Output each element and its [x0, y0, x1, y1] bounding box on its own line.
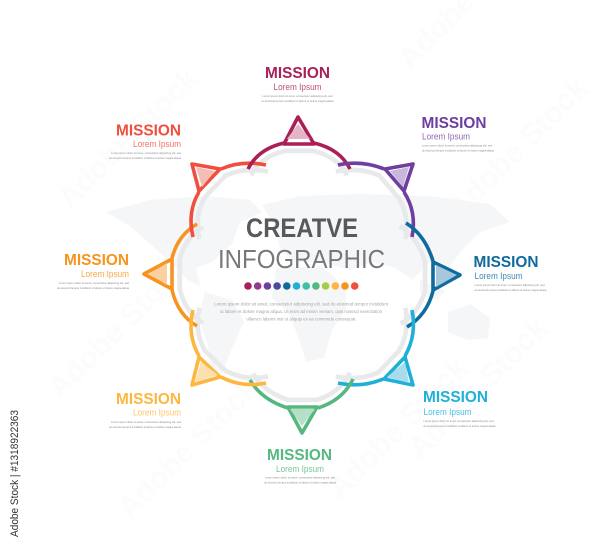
paragraph: ut labore et dolore magna aliqua. Ut enim ad minim veniam, quis nostrud exercitation: [220, 309, 382, 314]
label: left mission: Lorem Ipsum: [81, 269, 129, 280]
label: left mission: MISSION: [64, 252, 129, 269]
label: lower right mission: do eiusmod tempor incididunt ut labore et dolore magna aliqua: [424, 424, 496, 428]
label: upper right mission: Lorem ipsum dolor sit amet, consectetur adipiscing elit, sed: [422, 144, 492, 148]
label: lower left mission: [109, 391, 181, 429]
label: lower right mission: [423, 389, 496, 428]
title: [218, 213, 385, 274]
paragraph: [214, 302, 389, 322]
segment: cyan: [338, 310, 413, 385]
label: bottom mission: MISSION: [267, 447, 332, 464]
label: right mission: [474, 254, 547, 292]
watermark: Adobe Stock: [322, 352, 475, 505]
label: lower left mission: do eiusmod tempor incididunt ut labore et dolore magna aliqua: [109, 425, 181, 429]
label: left mission: Lorem ipsum dolor sit amet, consectetur adipiscing elit, sed: [59, 281, 129, 285]
label: lower right mission: MISSION: [423, 389, 488, 406]
segment: red: [191, 163, 266, 237]
label: bottom mission: Lorem ipsum dolor sit amet, consectetur adipiscing elit, sed: [265, 476, 335, 480]
world map: [106, 194, 510, 380]
label: top mission: Lorem Ipsum: [274, 82, 322, 93]
segment: green: [250, 379, 353, 433]
label: left mission: [57, 252, 129, 290]
label: lower left mission: MISSION: [116, 391, 181, 408]
label: right mission: MISSION: [474, 254, 538, 271]
label: top mission: [262, 65, 334, 103]
label: upper left mission: do eiusmod tempor incididunt ut labore et dolore magna aliqua: [109, 156, 181, 160]
stock id: Adobe Stock | #1318922363: [9, 410, 21, 537]
label: lower left mission: Lorem ipsum dolor sit amet, consectetur adipiscing elit, sed: [111, 420, 181, 424]
watermark: Adobe Stock: [442, 72, 595, 225]
label: bottom mission: do eiusmod tempor incididunt ut labore et dolore magna aliqua: [264, 480, 336, 484]
paragraph: ullamco laboris nisi ut aliquip ex ea commodo consequat: [246, 316, 356, 322]
label: lower right mission: Lorem ipsum dolor sit amet, consectetur adipiscing elit, sed: [424, 419, 494, 423]
label: upper left mission: MISSION: [116, 122, 181, 140]
title: CREATVE: [246, 213, 358, 243]
watermark: Adobe Stock: [402, 312, 555, 465]
label: upper right mission: do eiusmod tempor incididunt ut labore et dolore magna aliqua: [422, 148, 494, 152]
segment: blue: [406, 223, 460, 327]
segment: yellow: [191, 310, 266, 385]
label: top mission: MISSION: [265, 65, 330, 82]
segment: orange: [144, 224, 197, 326]
label: bottom mission: Lorem Ipsum: [276, 464, 324, 475]
segment: crimson: [248, 117, 350, 169]
segment: purple: [338, 163, 413, 237]
watermark: Adobe Stock: [42, 252, 195, 405]
label: upper left mission: Lorem ipsum dolor sit amet, consectetur adipiscing elit, sed: [111, 151, 181, 155]
label: right mission: Lorem Ipsum: [474, 271, 523, 282]
label: lower left mission: Lorem Ipsum: [133, 408, 181, 418]
watermark: Adobe Stock: [52, 62, 205, 215]
title: INFOGRAPHIC: [218, 244, 385, 274]
inner grey ring: [180, 151, 425, 400]
label: upper right mission: MISSION: [422, 115, 486, 132]
label: right mission: do eiusmod tempor incididunt ut labore et dolore magna aliqua: [474, 288, 547, 292]
label: left mission: do eiusmod tempor incididunt ut labore et dolore magna aliqua: [57, 286, 129, 290]
paragraph: Lorem ipsum dolor sit amet, consectetur adipiscing elit, sed do eiusmod tempor incididunt: [214, 302, 389, 306]
label: upper left mission: Lorem Ipsum: [133, 139, 181, 150]
label: top mission: Lorem ipsum dolor sit amet, consectetur adipiscing elit, sed: [262, 94, 333, 98]
label: lower right mission: Lorem Ipsum: [424, 407, 472, 418]
label: upper left mission: [109, 122, 181, 160]
watermark: Adobe Stock: [112, 372, 265, 525]
label: right mission: Lorem ipsum dolor sit amet, consectetur adipiscing elit, sed: [474, 283, 545, 287]
label: upper right mission: [422, 115, 494, 152]
label: bottom mission: [264, 447, 336, 484]
label: top mission: do eiusmod tempor incididunt ut labore et dolore magna aliqua: [262, 99, 334, 103]
colour dots: [244, 282, 359, 290]
label: upper right mission: Lorem Ipsum: [422, 132, 470, 142]
